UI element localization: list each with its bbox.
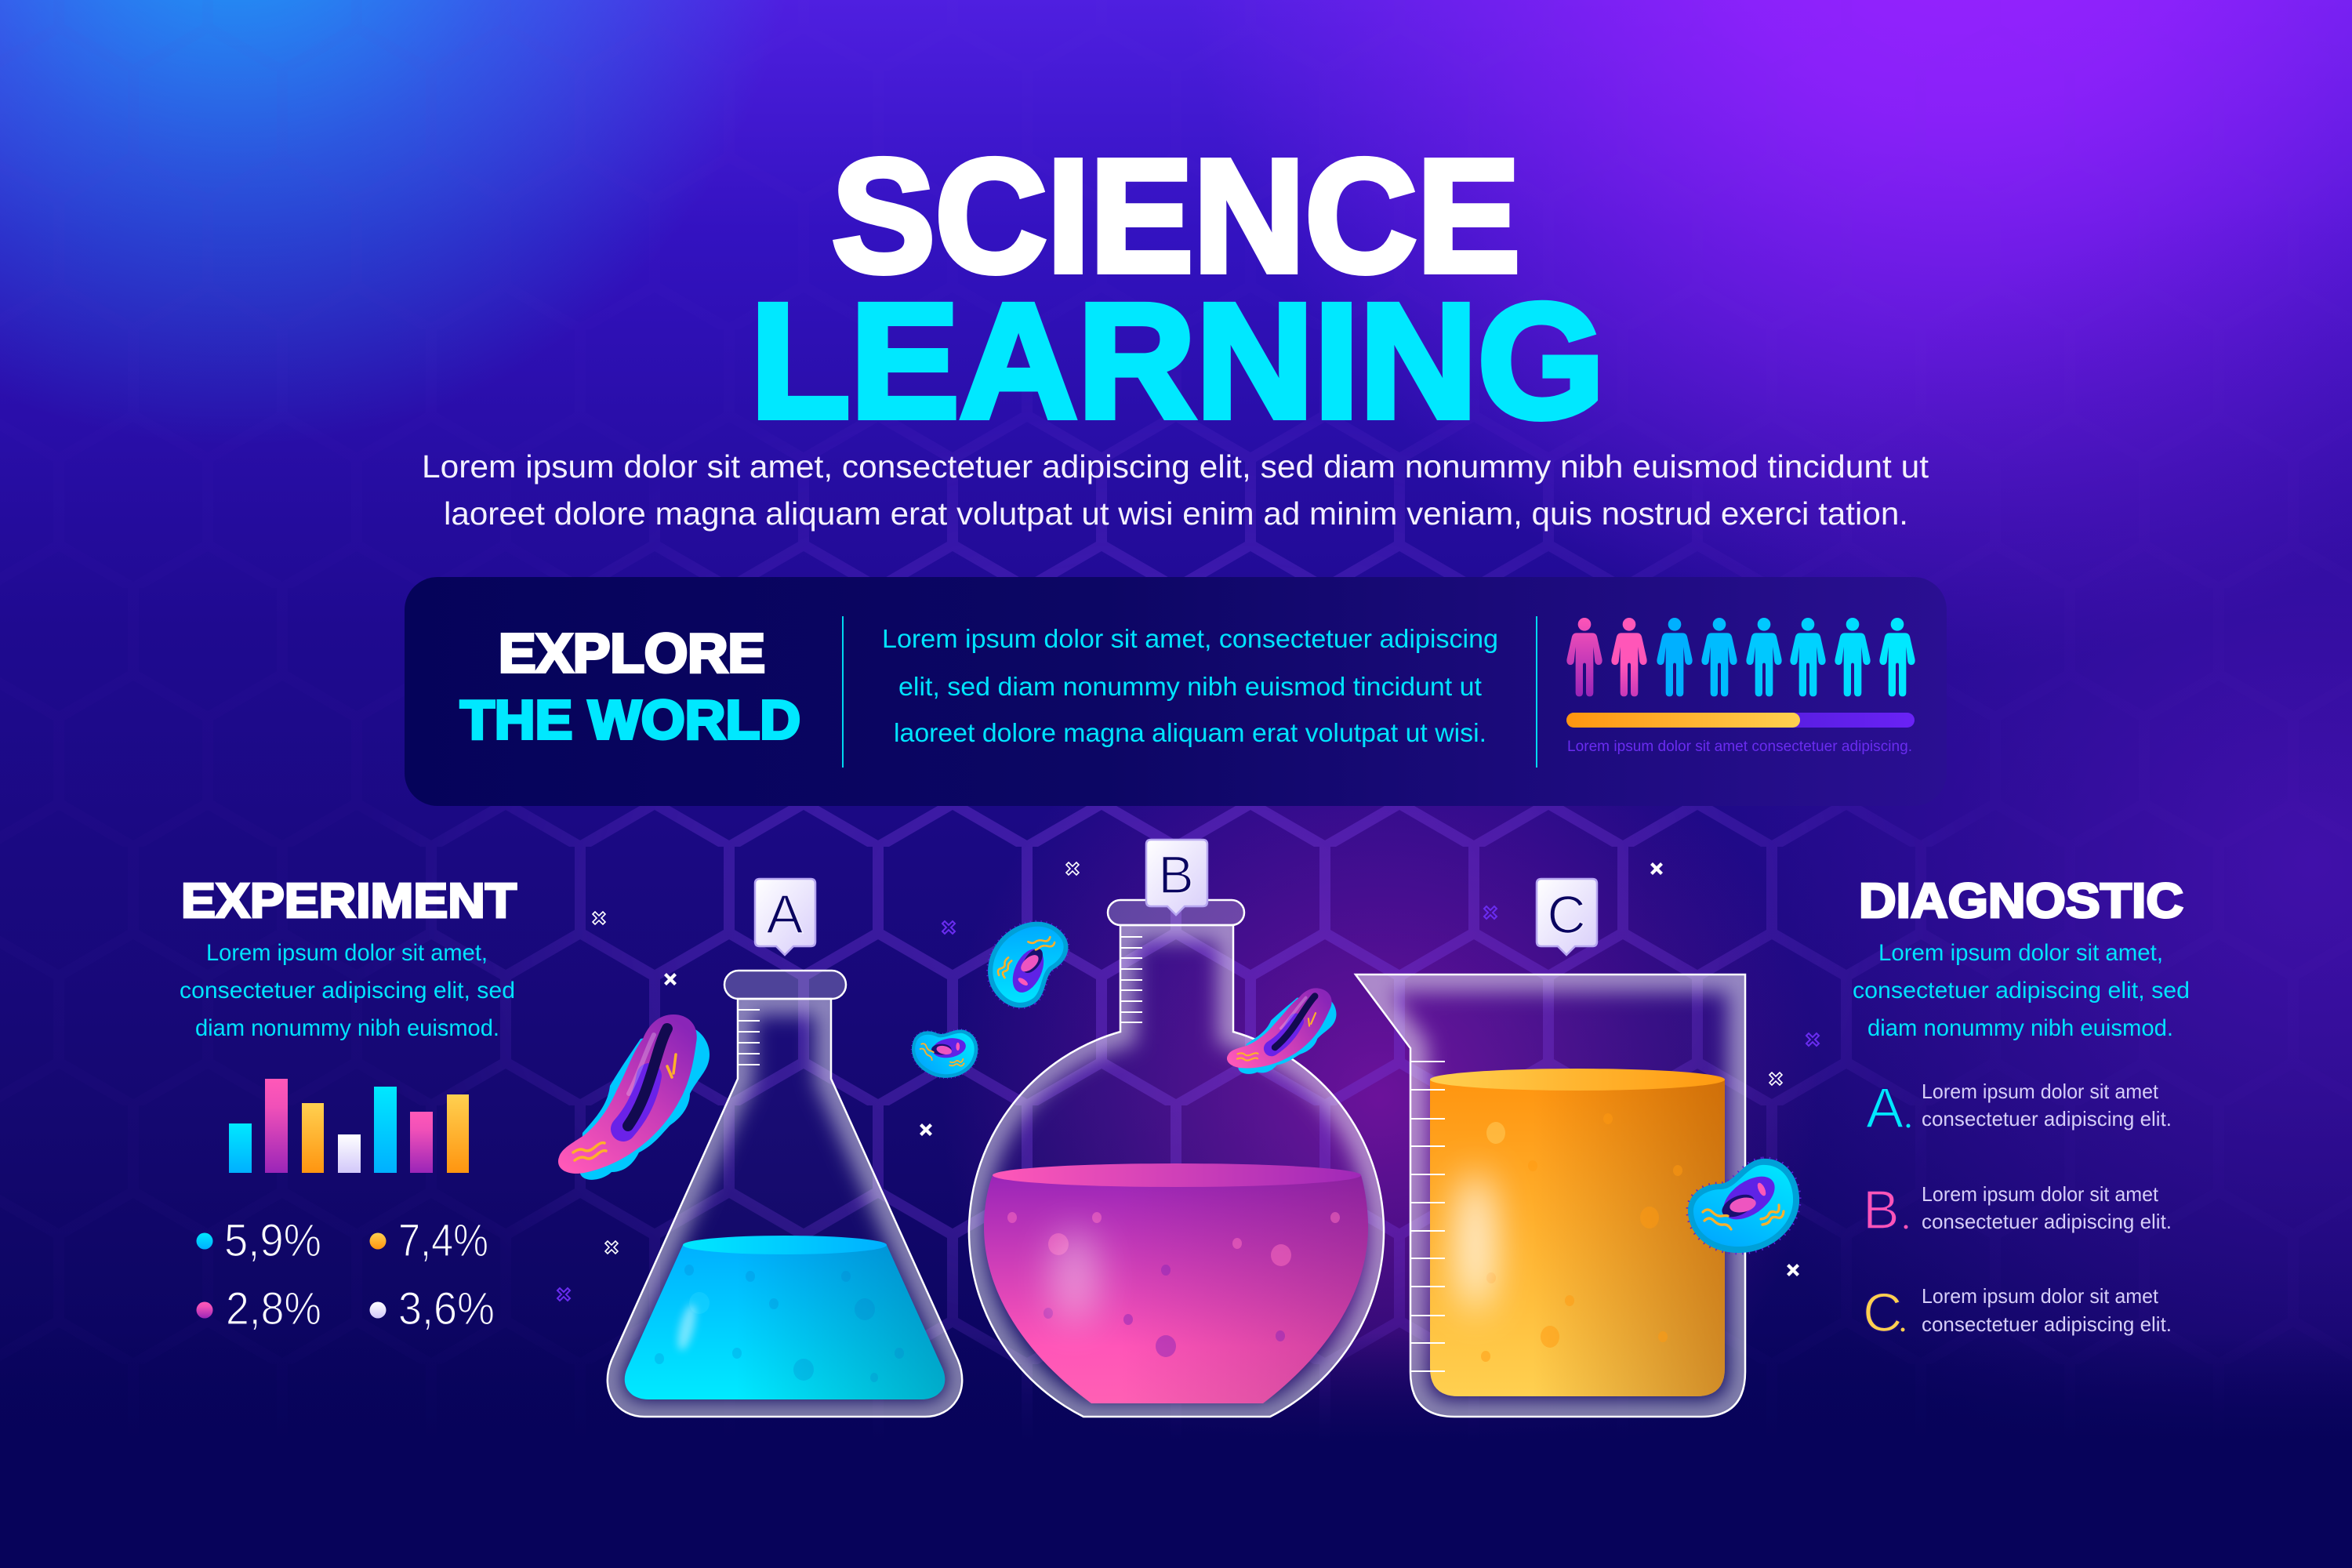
icon: cell microbe medium xyxy=(971,908,1087,1018)
item c: consectetuer adipiscing elit. xyxy=(1922,1312,2172,1336)
item c xyxy=(1863,1282,2172,1343)
experiment heading: EXPERIMENT xyxy=(181,874,517,928)
intro paragraph: laoreet dolore magna aliquam erat volutpat ut wisi enim ad minim veniam, quis nostrud exerci tation. xyxy=(444,495,1908,532)
item b: Lorem ipsum dolor sit amet xyxy=(1922,1182,2159,1206)
panel heading: THE WORLD xyxy=(460,689,800,750)
panel heading: EXPLORE xyxy=(499,622,765,684)
panel text: Lorem ipsum dolor sit amet, consectetuer adipiscing xyxy=(882,624,1498,653)
legend stats: 3,6% xyxy=(398,1283,495,1334)
intro paragraph: Lorem ipsum dolor sit amet, consectetuer adipiscing elit, sed diam nonummy nibh euismod tincidunt ut xyxy=(422,448,1929,485)
flask a lip xyxy=(724,971,846,999)
diagnostic heading: DIAGNOSTIC xyxy=(1859,874,2183,928)
bar chart xyxy=(229,1079,469,1173)
experiment text: Lorem ipsum dolor sit amet, xyxy=(206,940,488,966)
title line: science: SCIENCE xyxy=(832,126,1520,306)
diagnostic text: consectetuer adipiscing elit, sed xyxy=(1853,978,2190,1004)
experiment text xyxy=(180,940,515,1041)
legend stats xyxy=(196,1215,495,1334)
flask b xyxy=(969,840,1384,1417)
hexagon background pattern xyxy=(425,419,1909,1394)
liquid b xyxy=(984,1163,1368,1403)
diagnostic text xyxy=(1853,940,2190,1041)
icon: cell microbe large xyxy=(1688,1159,1799,1253)
legend stats: 2,8% xyxy=(226,1283,321,1334)
panel heading xyxy=(460,622,800,750)
panel text: laoreet dolore magna aliquam erat volutpat ut wisi. xyxy=(894,718,1486,747)
tag a: A xyxy=(767,884,804,945)
panel text: elit, sed diam nonummy nibh euismod tincidunt ut xyxy=(898,672,1482,701)
tag c: C xyxy=(1547,885,1586,945)
tag c xyxy=(1537,879,1597,955)
tag a xyxy=(755,879,815,955)
decorative x marks xyxy=(557,862,1819,1301)
flask a xyxy=(608,879,962,1417)
panel: diagnostic xyxy=(1853,874,2190,1343)
item c: Lorem ipsum dolor sit amet xyxy=(1922,1284,2159,1308)
icon: rod microbe on flask b xyxy=(1224,969,1342,1094)
icon: rod microbe left xyxy=(558,1014,710,1180)
tag b xyxy=(1146,840,1207,915)
tag b: B xyxy=(1158,845,1194,905)
title xyxy=(750,126,1605,452)
legend stats: 5,9% xyxy=(224,1215,321,1266)
item a: Lorem ipsum dolor sit amet xyxy=(1922,1080,2159,1103)
item a: A xyxy=(1866,1077,1904,1140)
beaker graduations xyxy=(1410,1062,1445,1371)
liquid a xyxy=(625,1236,945,1399)
flask b lip xyxy=(1108,900,1244,925)
beaker c xyxy=(1356,879,1745,1417)
experiment text: diam nonummy nibh euismod. xyxy=(195,1015,499,1041)
legend stats: 7,4% xyxy=(398,1215,488,1266)
item c: C xyxy=(1863,1282,1903,1343)
item a: consectetuer adipiscing elit. xyxy=(1922,1107,2172,1131)
item b xyxy=(1863,1179,2172,1240)
people pictogram xyxy=(1566,618,1915,696)
panel text xyxy=(882,624,1498,747)
floor shading xyxy=(0,1333,2352,1568)
item b: B xyxy=(1863,1179,1900,1240)
panel: experiment xyxy=(180,874,517,1334)
item a xyxy=(1866,1077,2172,1140)
icon: cell microbe small xyxy=(903,1012,985,1089)
title line: learning: LEARNING xyxy=(750,270,1605,452)
intro paragraph xyxy=(422,448,1929,532)
liquid c xyxy=(1430,1069,1725,1396)
item b: consectetuer adipiscing elit. xyxy=(1922,1210,2172,1233)
flask a graduations xyxy=(738,1010,760,1065)
progress caption: Lorem ipsum dolor sit amet consectetuer adipiscing. xyxy=(1567,739,1912,755)
diagnostic text: diam nonummy nibh euismod. xyxy=(1867,1015,2173,1041)
flask b graduations xyxy=(1120,937,1142,1022)
progress bar xyxy=(1566,713,1915,728)
diagnostic text: Lorem ipsum dolor sit amet, xyxy=(1878,940,2163,966)
experiment text: consectetuer adipiscing elit, sed xyxy=(180,978,515,1004)
panel: explore the world xyxy=(405,577,1947,806)
